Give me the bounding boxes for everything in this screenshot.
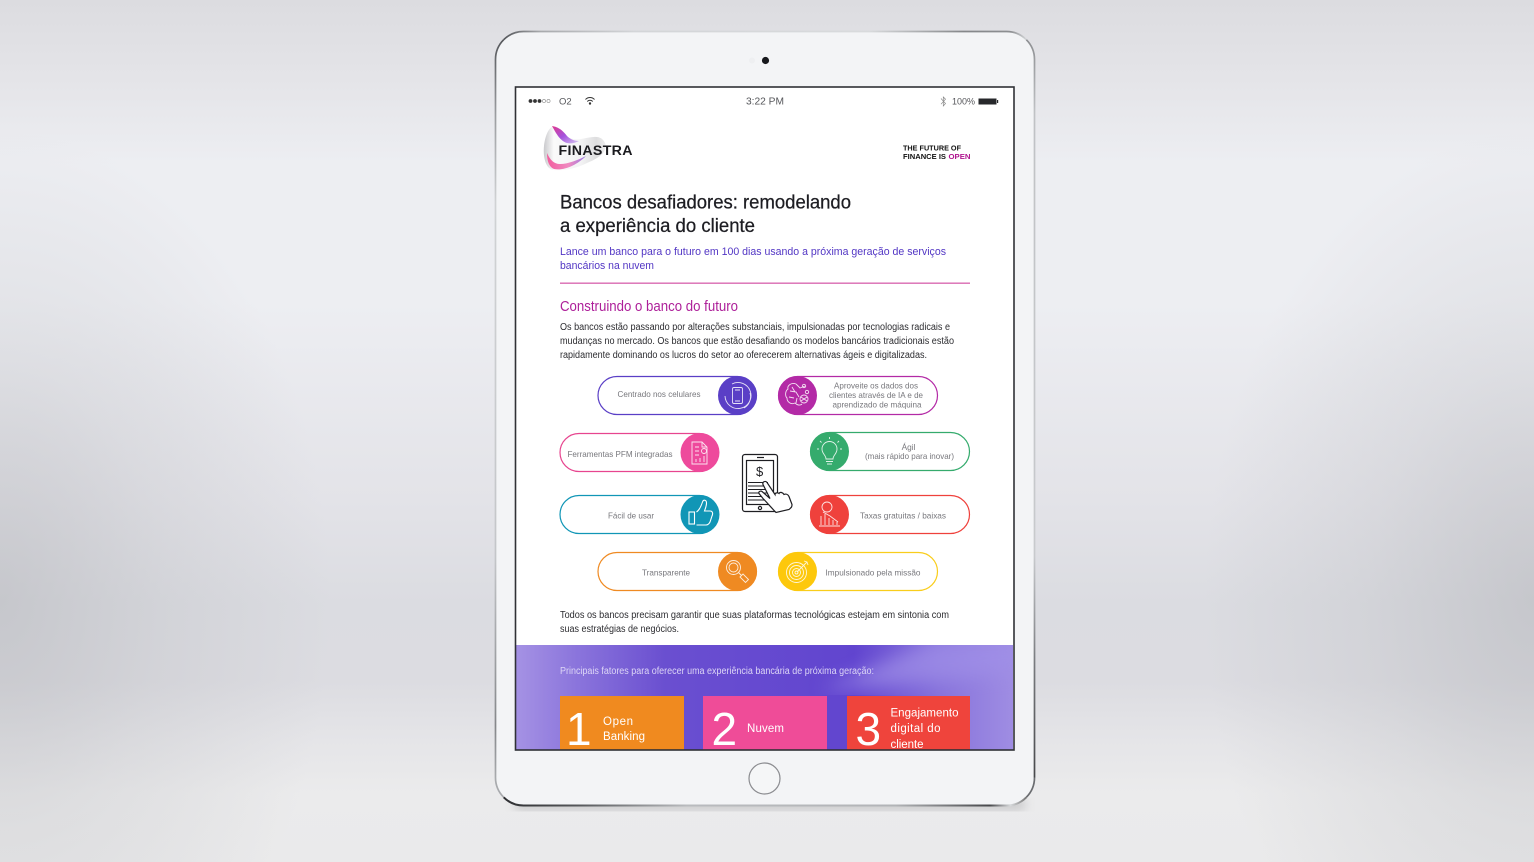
pill: low fees: Taxas gratuitas / baixas	[860, 510, 946, 520]
tagline: FINANCE IS	[903, 152, 946, 161]
tablet shadow	[515, 799, 1025, 810]
panel: key factors	[516, 645, 1013, 750]
closing paragraph	[560, 610, 949, 635]
card: open banking	[560, 696, 684, 755]
card: digital engagement: 3	[856, 703, 881, 755]
silver ribbon	[544, 127, 606, 170]
icon: bluetooth	[941, 97, 946, 106]
pill: easy to use	[560, 495, 720, 534]
closing paragraph: Todos os bancos precisam garantir que suas plataformas tecnológicas estejam em sintonia com	[560, 610, 949, 621]
icon: tablet with hand	[742, 454, 792, 512]
subtitle: bancários na nuvem	[560, 260, 654, 272]
logo: Finastra: FINASTRA	[558, 143, 632, 159]
pill: PFM tools: Ferramentas PFM integradas	[568, 449, 672, 459]
icon: tablet with hand: $	[756, 464, 764, 479]
signal and carrier	[529, 96, 572, 108]
card: open banking: 1	[566, 703, 592, 755]
icon: magnifier	[718, 552, 757, 591]
pill: agile	[810, 432, 970, 471]
subtitle: Lance um banco para o futuro em 100 dias usando a próxima geração de serviços	[560, 246, 946, 258]
card: cloud: Nuvem	[747, 723, 784, 735]
tagline: OPEN	[948, 152, 970, 161]
pill: easy to use: Fácil de usar	[608, 510, 654, 520]
intro paragraph: mudanças no mercado. Os bancos que estão desafiando os modelos bancários tradicionais estão	[560, 336, 954, 347]
card: digital engagement: digital do	[890, 723, 940, 735]
front camera	[749, 57, 769, 64]
pill: transparent	[598, 552, 757, 591]
logo: Finastra	[544, 126, 632, 170]
card: open banking: Banking	[603, 731, 645, 743]
subtitle	[560, 246, 946, 272]
card: cloud	[703, 696, 827, 755]
pill: mobile centric	[598, 376, 757, 415]
battery: 100%	[952, 96, 976, 108]
home button	[749, 763, 780, 794]
screen	[516, 87, 1020, 755]
intro paragraph: Os bancos estão passando por alterações substanciais, impulsionadas por tecnologias radicais e	[560, 322, 950, 333]
title: a experiência do cliente	[560, 216, 755, 237]
pill: transparent: Transparente	[642, 568, 690, 578]
card: digital engagement: cliente	[890, 739, 924, 751]
tagline: THE FUTURE OF	[903, 144, 961, 152]
pill: agile: Ágil	[902, 442, 916, 452]
card: digital engagement: Engajamento	[890, 708, 958, 720]
title	[560, 192, 851, 237]
icon: falling fees	[810, 495, 849, 534]
pill: data and AI	[778, 376, 938, 415]
pill: data and AI: Aproveite os dados dos	[834, 380, 918, 390]
status bar	[529, 96, 998, 108]
card: cloud: 2	[712, 703, 737, 755]
intro paragraph	[560, 322, 954, 361]
intro paragraph: rapidamente dominando os lucros do setor ao oferecerem alternativas ágeis e digitalizadas.	[560, 350, 927, 361]
panel heading: Principais fatores para oferecer uma experiência bancária de próxima geração:	[560, 666, 874, 677]
pill: PFM tools	[560, 433, 720, 472]
icon: wifi	[586, 97, 594, 104]
pill: mission driven: Impulsionado pela missão	[826, 568, 921, 578]
signal and carrier: O2	[559, 96, 572, 108]
icon: thumbs up	[680, 495, 720, 534]
pink ribbon	[547, 153, 586, 169]
pill: mobile centric: Centrado nos celulares	[618, 389, 700, 399]
icon: brain	[778, 376, 817, 415]
clock: 3:22 PM	[746, 96, 784, 108]
pill: mission driven	[778, 552, 938, 591]
card: open banking: Open	[603, 716, 633, 728]
icon: report	[680, 433, 720, 472]
battery	[952, 96, 998, 108]
tablet device	[496, 32, 1034, 810]
pill: agile: (mais rápido para inovar)	[865, 451, 954, 461]
icon: target	[778, 552, 817, 591]
pill: low fees	[810, 495, 970, 534]
closing paragraph: suas estratégias de negócios.	[560, 624, 679, 635]
tablet rim highlights	[496, 32, 1034, 806]
light diagonal sheen	[830, 645, 988, 695]
title: Bancos desafiadores: remodelando	[560, 192, 851, 214]
section heading: Construindo o banco do futuro	[560, 299, 738, 315]
tagline	[903, 144, 970, 161]
pill: data and AI: clientes através de IA e de	[829, 390, 923, 400]
card: digital engagement	[847, 696, 970, 755]
tablet body	[496, 32, 1034, 806]
icon: lightbulb	[810, 432, 849, 471]
purple fold	[552, 126, 579, 143]
icon: phone refresh	[718, 376, 757, 415]
pill: data and AI: aprendizado de máquina	[832, 400, 922, 410]
